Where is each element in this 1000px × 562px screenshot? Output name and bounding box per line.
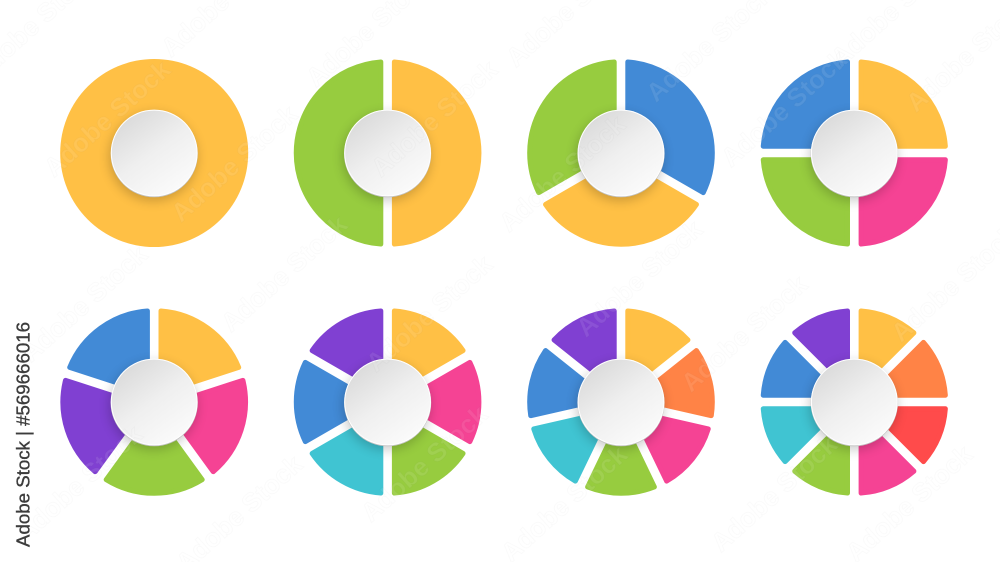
segment: purple <box>551 305 644 402</box>
hub shadow <box>109 362 197 450</box>
segment: blue <box>525 349 613 431</box>
segment: purple <box>53 360 158 476</box>
segment: purple <box>308 303 415 410</box>
chart: three segment ring <box>504 42 738 244</box>
hub highlight <box>578 359 664 445</box>
segment: yellow <box>835 307 916 397</box>
hub highlight <box>578 110 664 196</box>
hub disc <box>112 360 197 444</box>
hub rim <box>577 110 665 197</box>
hub highlight <box>344 110 431 196</box>
chart: one segment ring <box>60 59 248 247</box>
stock watermark pattern: Adobe Stock <box>355 399 493 528</box>
hub highlight <box>111 110 198 196</box>
chart: six segment ring <box>296 303 479 501</box>
segment: green <box>793 407 874 497</box>
segment: full yellow ring <box>60 59 248 247</box>
hub disc <box>812 111 897 195</box>
hub disc <box>579 360 663 444</box>
hub disc <box>812 360 897 444</box>
side label: stock reference: Adobe Stock | #569666016 <box>14 322 34 547</box>
segment: purple <box>793 307 874 397</box>
segment: green <box>588 418 654 493</box>
hub shadow <box>576 362 664 450</box>
segment: green <box>360 394 468 501</box>
stock watermark pattern: Adobe Stock <box>215 209 353 338</box>
segment: pink <box>150 360 256 476</box>
stock watermark pattern: Adobe Stock <box>38 54 176 183</box>
segment: yellow <box>598 305 691 402</box>
segment: green <box>504 42 652 214</box>
segment: green <box>296 62 381 244</box>
hub shadow <box>809 113 897 201</box>
stock watermark pattern: Adobe Stock <box>493 109 631 238</box>
hub rim <box>111 110 198 197</box>
stock watermark pattern: Adobe Stock <box>10 419 148 548</box>
hub disc <box>579 111 663 195</box>
segment: red <box>860 382 950 463</box>
hub highlight <box>344 359 431 445</box>
segment: pink <box>401 362 479 442</box>
hub shadow <box>343 113 431 201</box>
segment: pink <box>819 118 961 260</box>
segment: teal <box>308 394 415 501</box>
hub rim <box>577 359 665 446</box>
chart: four segment ring <box>748 46 961 260</box>
hub disc <box>345 360 430 444</box>
stock watermark pattern: Adobe Stock <box>365 54 503 183</box>
segment: pink <box>612 386 713 485</box>
segment: blue <box>62 300 186 421</box>
stock watermark pattern: Adobe Stock <box>360 249 498 378</box>
stock watermark pattern: Adobe Stock <box>570 214 708 343</box>
hub shadow <box>343 362 431 450</box>
hub disc <box>345 111 430 195</box>
hub rim <box>344 110 431 197</box>
stock watermark pattern: Adobe Stock <box>705 429 843 558</box>
chart: eight segment ring <box>759 307 950 497</box>
segment: orange <box>629 349 717 431</box>
hub highlight <box>811 110 898 196</box>
segment: yellow <box>360 303 468 410</box>
segment: orange <box>860 341 950 422</box>
hub rim <box>111 359 198 446</box>
segment: yellow <box>122 300 247 421</box>
segment: blue <box>759 341 849 422</box>
hub highlight <box>811 359 898 445</box>
hub shadow <box>809 362 897 450</box>
segment: green <box>748 118 890 260</box>
stock watermark pattern: Adobe Stock <box>165 99 303 228</box>
segment: yellow <box>546 161 696 244</box>
segment: teal <box>759 382 849 463</box>
hub shadow <box>576 113 664 201</box>
chart: five segment ring <box>53 300 256 493</box>
segment: yellow <box>394 62 479 244</box>
hub rim <box>344 359 431 446</box>
chart: seven segment ring <box>525 305 717 493</box>
stock watermark pattern: Adobe Stock <box>675 269 813 398</box>
segment: blue <box>748 46 890 188</box>
segment: yellow <box>819 46 961 188</box>
hub rim <box>811 359 898 446</box>
segment: blue <box>590 42 738 214</box>
hub disc <box>112 111 197 195</box>
segment: pink <box>835 407 916 497</box>
segment: teal <box>529 386 630 485</box>
stock watermark pattern: Adobe Stock <box>15 239 153 368</box>
hub rim <box>811 110 898 197</box>
segment: green <box>106 414 202 493</box>
segment: blue <box>296 362 374 442</box>
hub highlight <box>111 359 198 445</box>
hub shadow <box>109 113 197 201</box>
chart: two segment ring <box>296 62 479 244</box>
stock watermark pattern: Adobe Stock <box>715 44 853 173</box>
